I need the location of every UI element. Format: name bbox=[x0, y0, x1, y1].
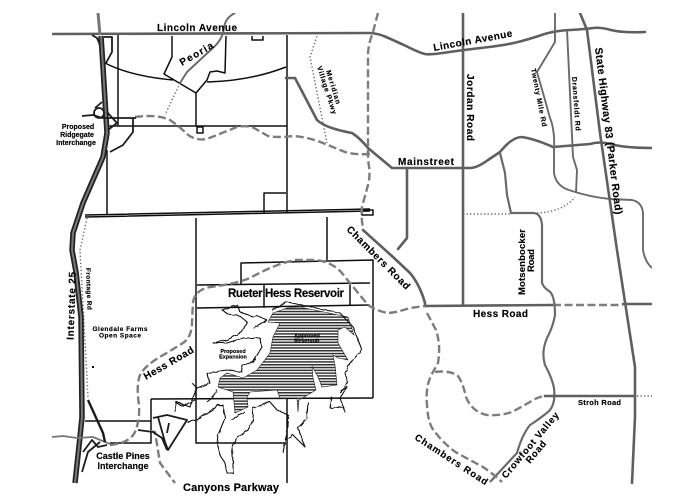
label: Stroh Road: Stroh Road bbox=[578, 398, 621, 407]
label: Proposed Ridgegate Interchange: Ridgegate bbox=[60, 132, 94, 139]
Peoria road line bbox=[180, 13, 235, 83]
Canyons Parkway dashed alignment bbox=[150, 431, 175, 483]
label: Chambers Road south: Chambers Road bbox=[412, 432, 490, 488]
Twenty Mile Road line bbox=[537, 13, 652, 268]
Lincoln Avenue bbox=[53, 28, 645, 54]
label: Glendale Farms Open Space bbox=[92, 326, 148, 340]
label: Rueter Hess Reservoir: Rueter Hess Reservoir bbox=[228, 288, 345, 300]
label: Approved Reservoir: Reservoir bbox=[294, 338, 321, 344]
label: Motsenbocker Road bbox=[517, 229, 537, 295]
Castle Pines interchange bbox=[52, 400, 187, 472]
Hess Road planned extension bbox=[553, 304, 623, 306]
connector roads bbox=[398, 168, 407, 249]
label: Castle Pines Interchange: Castle Pines bbox=[96, 451, 150, 461]
label: Lincoln Avenue west: Lincoln Avenue bbox=[157, 23, 237, 34]
dotted planned roads bbox=[80, 33, 575, 397]
Glendale marker bbox=[92, 366, 94, 368]
reservoir hatched area bbox=[218, 307, 354, 413]
label: Motsenbocker Road: Motsenbocker bbox=[517, 229, 528, 295]
label: Proposed Expansion: Expansion bbox=[219, 354, 248, 360]
label: Approved Reservoir bbox=[294, 334, 321, 344]
label: Jordan Road: Jordan Road bbox=[464, 74, 475, 141]
label: Proposed Expansion: Proposed bbox=[220, 349, 246, 355]
Ridgegate interchange bbox=[82, 35, 136, 152]
label: Meridian Village Pkwy: Village Pkwy bbox=[315, 65, 337, 115]
southern dashed branch bbox=[435, 372, 545, 415]
label: Interstate 25: Interstate 25 bbox=[66, 271, 79, 340]
label: Peoria: Peoria bbox=[178, 40, 216, 69]
Chambers Road dashed alignment bbox=[362, 13, 502, 482]
Chambers Road solid section bbox=[363, 230, 425, 306]
label: Crowfoot Valley Road: Road bbox=[524, 439, 549, 466]
label: Glendale Farms Open Space: Glendale Farms bbox=[92, 326, 148, 333]
label: Glendale Farms Open Space: Open Space bbox=[99, 332, 141, 340]
label: Hess Road west: Hess Road bbox=[142, 345, 196, 383]
label: Meridian Village Pkwy: Meridian bbox=[324, 70, 341, 105]
label: State Highway 83 (Parker Road): State Highway 83 (Parker Road) bbox=[592, 47, 624, 215]
Interstate 25 bbox=[72, 13, 107, 483]
label: Crowfoot Valley Road: Crowfoot Valley bbox=[500, 410, 562, 481]
label: Hess Road east: Hess Road bbox=[473, 309, 528, 320]
label: Twenty Mile Rd: Twenty Mile Rd bbox=[529, 68, 547, 127]
Mainstreet line bbox=[286, 78, 652, 168]
label: Dransfeldt Rd: Dransfeldt Rd bbox=[570, 77, 581, 131]
label: Proposed Ridgegate Interchange bbox=[56, 124, 96, 147]
parcel boundaries bbox=[85, 35, 373, 483]
label: Chambers Road north: Chambers Road bbox=[344, 224, 412, 292]
label: Mainstreet: Mainstreet bbox=[398, 157, 455, 168]
label: Proposed Expansion bbox=[219, 349, 248, 360]
label: Frontage Rd: Frontage Rd bbox=[84, 268, 92, 310]
Hess Road dashed alignment bbox=[110, 260, 425, 445]
label: Castle Pines Interchange bbox=[96, 451, 150, 471]
label: Approved Reservoir: Approved bbox=[294, 334, 320, 340]
Hess Road line bbox=[425, 304, 651, 306]
Stroh Road line bbox=[545, 395, 635, 397]
label: Canyons Parkway: Canyons Parkway bbox=[183, 482, 280, 494]
Dransfeldt Road line bbox=[567, 30, 577, 193]
label: Lincoln Avenue east: Lincoln Avenue bbox=[433, 28, 514, 54]
label: Castle Pines Interchange: Interchange bbox=[97, 461, 149, 471]
label: Proposed Ridgegate Interchange: Interchange bbox=[56, 140, 96, 147]
label: Motsenbocker Road: Road bbox=[526, 249, 537, 272]
Stroh Road dotted extension bbox=[637, 395, 652, 397]
reservoir contour lines bbox=[175, 302, 362, 473]
Motsenbocker and Crowfoot Valley Road line bbox=[490, 153, 555, 482]
Ridgegate dashed alignment bbox=[135, 116, 370, 154]
Jordan Road line bbox=[462, 13, 464, 305]
label: Proposed Ridgegate Interchange: Proposed bbox=[62, 124, 94, 131]
State Highway 83 line bbox=[580, 13, 635, 483]
